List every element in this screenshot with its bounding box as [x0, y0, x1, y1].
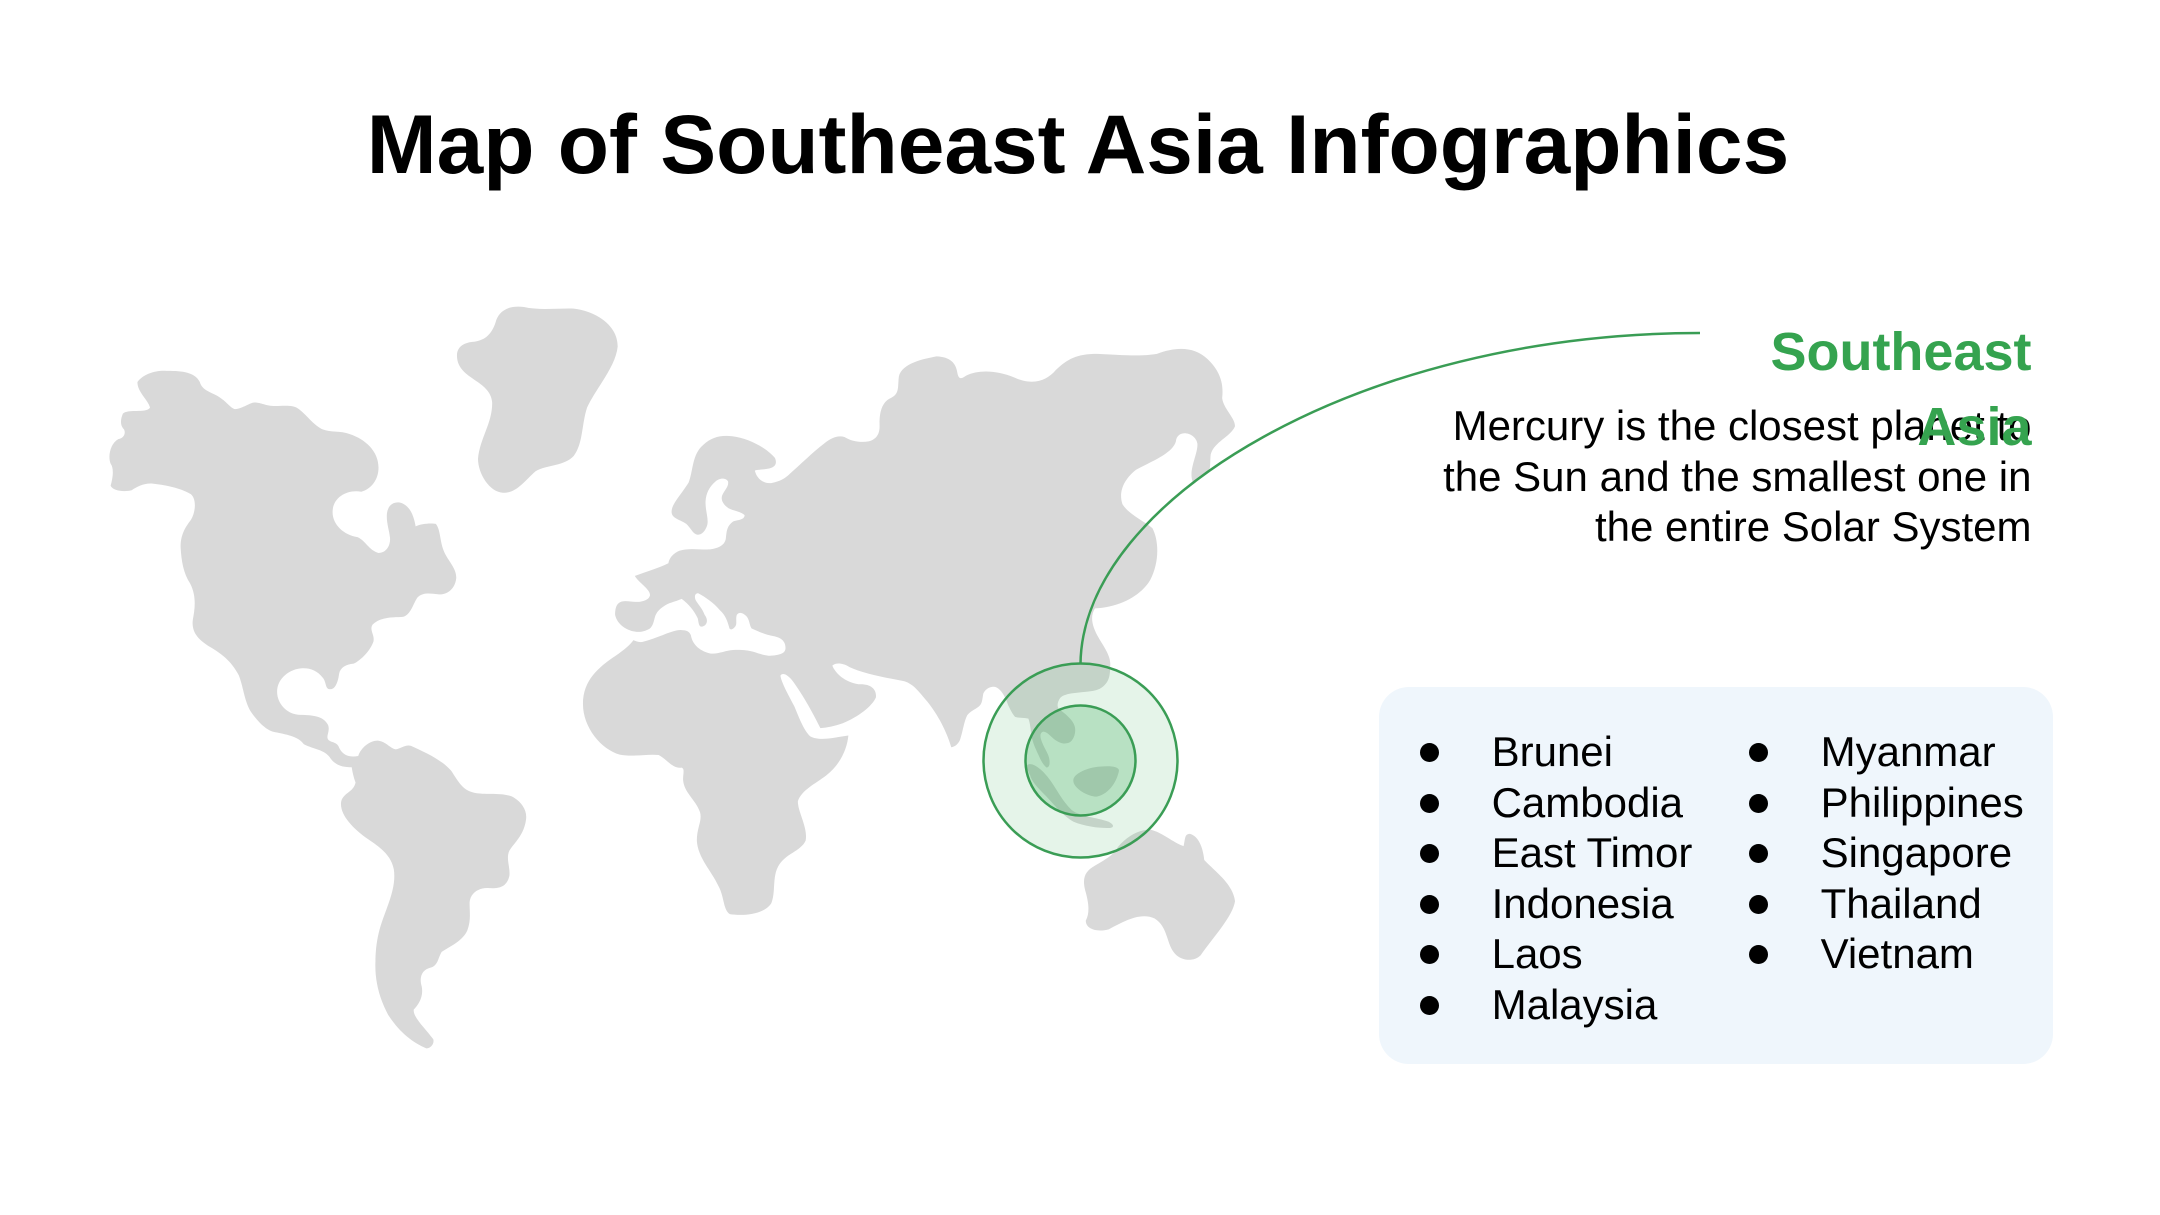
map: Greenland [457, 307, 618, 493]
country list: column 1: Malaysia [1492, 980, 1657, 1028]
description text [1443, 402, 2032, 550]
description text: the entire Solar System [1595, 503, 2032, 550]
country list: column 1: Laos [1492, 930, 1583, 977]
country list: column 2 [1749, 728, 2024, 977]
description text: Mercury is the closest planet to [1453, 402, 2032, 449]
map: Australia [1084, 830, 1235, 960]
title: Map of Southeast Asia Infographics [367, 97, 1789, 191]
country list: column 1: Indonesia [1492, 880, 1674, 926]
country list: column 2: Vietnam [1821, 930, 1974, 977]
map: world continents [109, 307, 1235, 1048]
country list: column 1: East Timor [1492, 829, 1692, 876]
country list: column 2: Myanmar [1821, 728, 1996, 775]
heading: Southeast Asia: Asia [1917, 397, 2032, 457]
highlight: outer circle [984, 664, 1178, 858]
map: Borneo [1073, 766, 1119, 797]
highlight: inner circle [1026, 706, 1136, 816]
map: Sumatra and Java [1027, 764, 1113, 828]
map: Americas [109, 371, 526, 1048]
panel: countries [1379, 687, 2053, 1064]
map: Eurasia and Africa [583, 349, 1235, 915]
country list: column 1: Brunei [1492, 728, 1613, 775]
connector line [1080, 333, 1700, 664]
country list: column 2: Philippines [1821, 778, 2024, 826]
country list: column 2: Thailand [1821, 880, 1982, 926]
heading: Southeast Asia: Southeast [1770, 322, 2032, 382]
country list: column 1 [1420, 728, 1692, 1028]
country list: column 1: Cambodia [1492, 778, 1683, 826]
country list: column 2: Singapore [1821, 829, 2012, 876]
description text: the Sun and the smallest one in [1443, 452, 2032, 500]
heading: Southeast Asia [1770, 322, 2032, 457]
